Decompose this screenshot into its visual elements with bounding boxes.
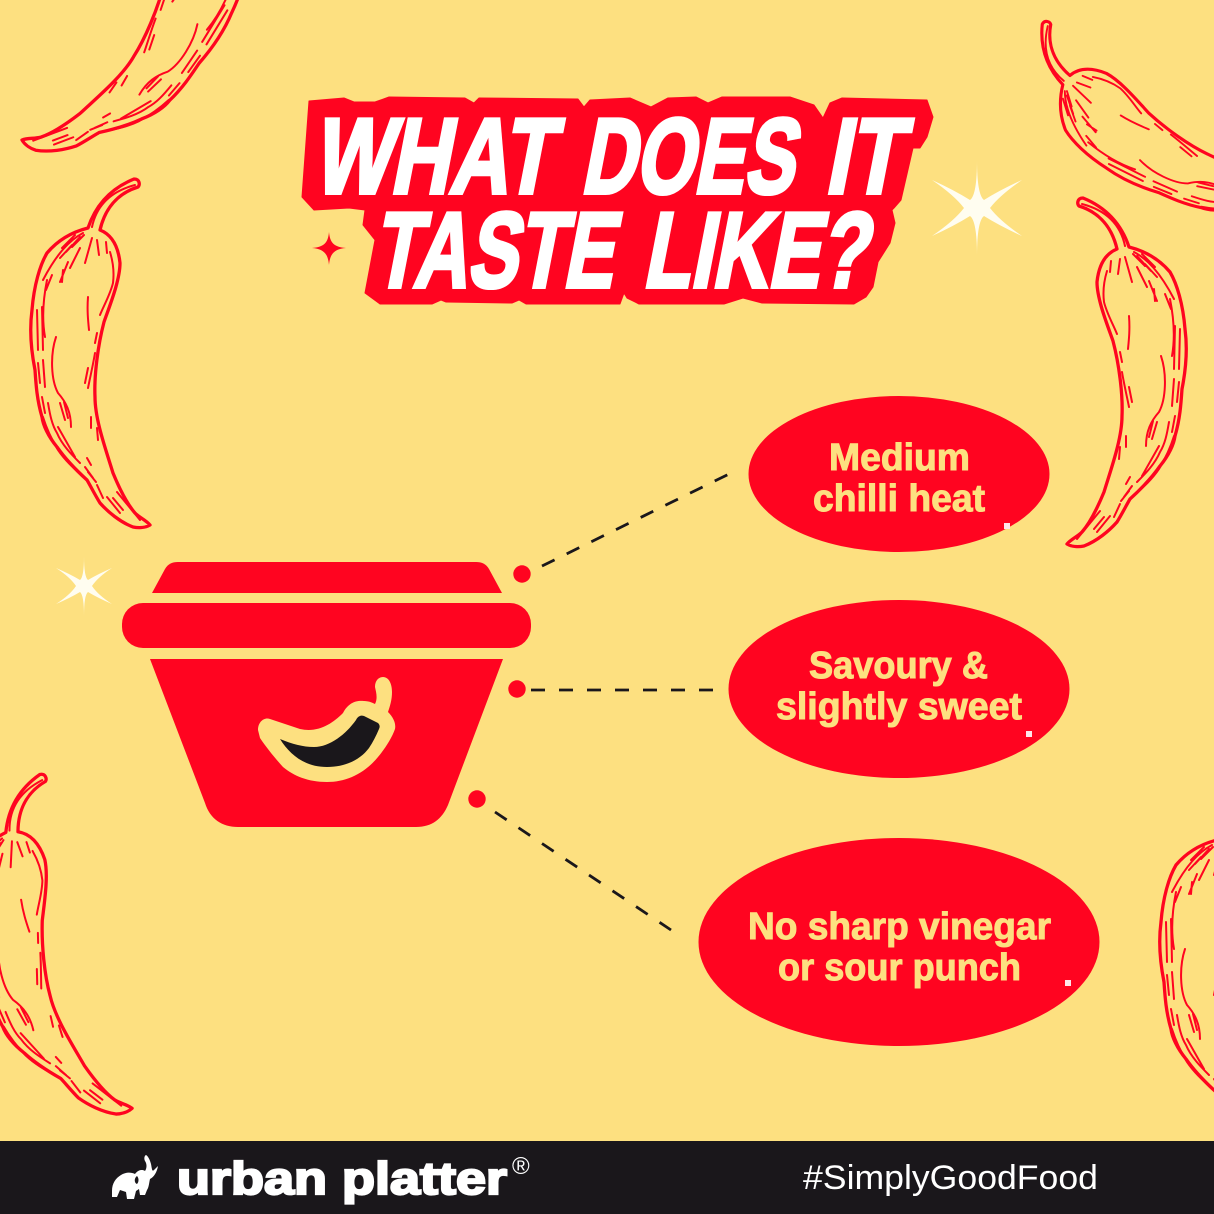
callout: savoury and slightly sweet: Savoury & <box>809 645 988 687</box>
chilli illustration: top right <box>996 11 1214 266</box>
title line 1 <box>308 96 919 216</box>
icon: small white sparkle <box>56 556 112 616</box>
connector dot and dashed line: middle <box>508 680 715 698</box>
icon: elephant logo <box>112 1155 158 1199</box>
title red backing <box>302 97 933 304</box>
bowl lid <box>152 562 502 593</box>
callout: medium chilli heat: Medium <box>829 437 970 479</box>
icon: red sparkle <box>312 232 346 265</box>
registered mark: ® <box>512 1153 530 1180</box>
bowl rim <box>122 603 531 648</box>
chilli emblem <box>258 677 395 782</box>
connector dot and dashed line: top <box>513 473 731 583</box>
title line 2: TASTE <box>368 190 631 310</box>
connector dot and dashed line: bottom <box>468 790 671 930</box>
title line 1: WHAT <box>308 96 570 216</box>
callout: no sharp vinegar or sour punch: No sharp vinegar <box>748 906 1051 948</box>
chilli illustration: bottom left <box>0 771 133 1137</box>
callout: savoury and slightly sweet: slightly sweet <box>776 686 1022 728</box>
chilli illustration: left <box>31 179 150 528</box>
chilli illustration: top left <box>21 0 298 202</box>
callout: medium chilli heat <box>748 396 1050 552</box>
callout: no sharp vinegar or sour punch <box>698 838 1100 1046</box>
callout: savoury and slightly sweet <box>728 600 1070 778</box>
chilli illustration: right <box>1067 198 1186 547</box>
brand name: urban platter <box>177 1153 507 1204</box>
chilli illustration: bottom right <box>1160 791 1214 1140</box>
title line 1: DOES <box>576 96 812 216</box>
footer bar <box>0 1141 1214 1214</box>
title line 1: IT <box>820 96 919 216</box>
title <box>302 96 933 310</box>
title line 2: LIKE? <box>638 190 885 310</box>
callout: no sharp vinegar or sour punch: or sour punch <box>778 947 1021 989</box>
bowl icon <box>122 562 531 827</box>
bowl body <box>150 659 503 827</box>
callout: medium chilli heat: chilli heat <box>813 478 985 520</box>
hashtag: #SimplyGoodFood <box>803 1159 1098 1197</box>
icon: large white sparkle <box>932 160 1022 256</box>
